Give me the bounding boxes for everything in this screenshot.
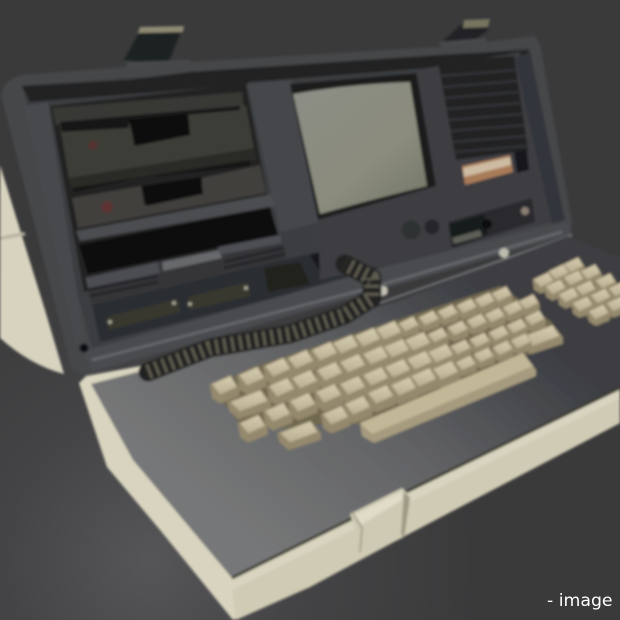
- center frame pillar: [247, 80, 322, 232]
- left latch handle: [124, 26, 192, 82]
- monitor screen: [293, 82, 427, 214]
- lid frame: [1, 36, 572, 374]
- base cream shell: [79, 366, 620, 620]
- row 4: [277, 324, 563, 450]
- nameplate: [462, 155, 513, 185]
- keyboard underlay: [212, 286, 552, 428]
- row 2: [227, 294, 540, 419]
- lid inner recess: [22, 48, 558, 348]
- coiled cable: [148, 264, 372, 372]
- front latch: [350, 488, 410, 556]
- lower lid band: [80, 222, 572, 372]
- upper drive indicator: [88, 140, 98, 150]
- right frame column: [515, 52, 565, 224]
- shaded base front: [232, 398, 620, 620]
- upper drive: [52, 92, 256, 190]
- left frame pillar: [24, 102, 84, 345]
- speaker grille: [438, 56, 528, 160]
- connector panel: [92, 240, 378, 342]
- drive bay: [50, 84, 276, 292]
- space bar: [360, 353, 536, 443]
- left control knob: [402, 220, 420, 240]
- black slot: [79, 207, 278, 274]
- lower drive: [72, 160, 266, 228]
- row 1: [210, 286, 513, 404]
- right panel: [318, 52, 552, 280]
- monitor bezel: [290, 73, 436, 220]
- side slot: [514, 150, 529, 173]
- cream rear housing: [0, 165, 64, 374]
- top shadow band: [22, 50, 530, 102]
- row 3: [238, 310, 546, 443]
- vent strips: [85, 235, 288, 305]
- main keyboard: [210, 286, 563, 450]
- drive shelf bar: [76, 194, 276, 241]
- numeric keypad: [533, 257, 620, 326]
- right latch handle: [438, 19, 490, 56]
- deck front shadow edge: [232, 388, 620, 578]
- keyboard deck: [91, 236, 620, 578]
- lower drive indicator: [102, 202, 112, 212]
- ports block: [448, 198, 535, 248]
- right control knob: [424, 220, 440, 234]
- caption: - image: [547, 591, 613, 611]
